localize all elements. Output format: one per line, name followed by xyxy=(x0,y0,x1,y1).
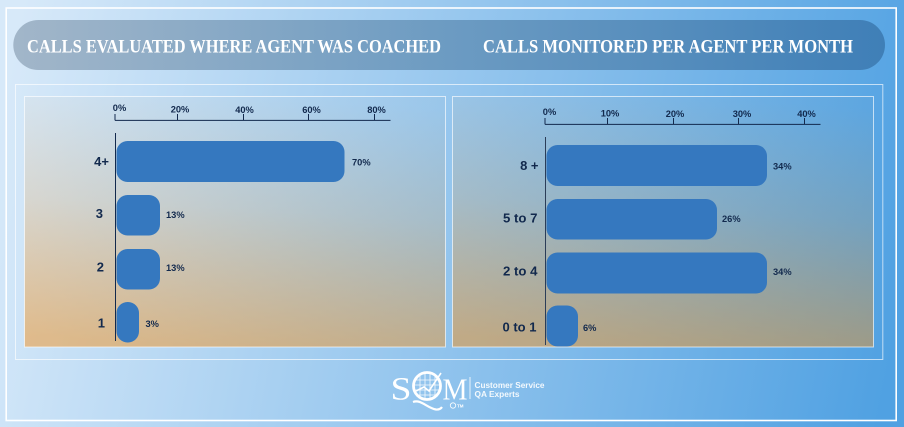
bar: 2 to 4 34%: 2 to 4 xyxy=(503,264,538,278)
top axis: 80% xyxy=(367,105,387,115)
bar: 0 to 1 6%: 6% xyxy=(583,323,597,333)
logo divider xyxy=(469,377,471,399)
bar: 2 to 4 34% xyxy=(503,252,792,294)
bar: 8 + 34% xyxy=(520,145,792,186)
panel: calls evaluated where agent was coached xyxy=(24,96,446,347)
bar: 1 3%: 3% xyxy=(146,319,160,329)
top axis: 30% xyxy=(733,109,752,119)
bar: 3 13%: 13% xyxy=(166,210,185,220)
header band xyxy=(13,20,885,70)
SQM logo xyxy=(390,372,545,410)
logo tagline: QA Experts xyxy=(474,389,520,399)
bar: 1 3% xyxy=(98,302,160,342)
vertical axis xyxy=(544,137,546,345)
top axis: 40% xyxy=(797,109,817,119)
panel: calls monitored per agent per month xyxy=(452,96,874,347)
logo trademark: TM xyxy=(457,404,464,408)
bar: 5 to 7 26%: 26% xyxy=(722,214,741,224)
bar: 2 13%: 13% xyxy=(166,263,185,273)
top axis xyxy=(113,103,390,120)
bar: 0 to 1 6%: 0 to 1 xyxy=(502,320,536,334)
top axis: 0% xyxy=(113,103,127,113)
top axis: 60% xyxy=(302,105,322,115)
logo globe Q xyxy=(413,372,442,410)
bar: 3 13%: 3 xyxy=(96,206,103,221)
top axis: 20% xyxy=(171,104,190,114)
bar: 2 to 4 34%: 34% xyxy=(773,267,792,277)
bar: 0 to 1 6% xyxy=(502,306,597,346)
bar: 4+ 70%: 70% xyxy=(352,158,371,168)
top axis: 10% xyxy=(601,108,620,118)
heading: calls monitored: CALLS MONITORED PER AGENT PER MONTH xyxy=(483,37,854,57)
bar: 2 13%: 2 xyxy=(97,260,104,274)
top axis: 0% xyxy=(543,107,557,117)
bar: 5 to 7 26%: 5 to 7 xyxy=(503,210,538,226)
vertical axis xyxy=(114,133,116,341)
bar: 4+ 70%: 4+ xyxy=(94,154,109,169)
logo wordmark: M xyxy=(442,372,468,406)
logo tagline: Customer Service xyxy=(474,380,545,390)
top axis xyxy=(543,107,820,124)
top axis: 20% xyxy=(666,109,685,119)
bar: 1 3%: 1 xyxy=(98,316,105,330)
bar: 4+ 70% xyxy=(94,141,371,182)
logo wordmark: S xyxy=(390,372,412,408)
bar: 3 13% xyxy=(96,195,185,236)
logo tagline xyxy=(474,380,545,399)
top axis: 40% xyxy=(235,105,255,115)
logo trademark xyxy=(450,403,464,408)
charts frame xyxy=(16,84,883,360)
bar: 8 + 34%: 8 + xyxy=(520,158,539,173)
logo wordmark xyxy=(390,372,468,408)
bar: 8 + 34%: 34% xyxy=(773,162,792,172)
heading: calls evaluated: CALLS EVALUATED WHERE AGENT WAS COACHED xyxy=(27,37,441,57)
bar: 2 13% xyxy=(97,249,185,290)
bar: 5 to 7 26% xyxy=(503,199,741,240)
